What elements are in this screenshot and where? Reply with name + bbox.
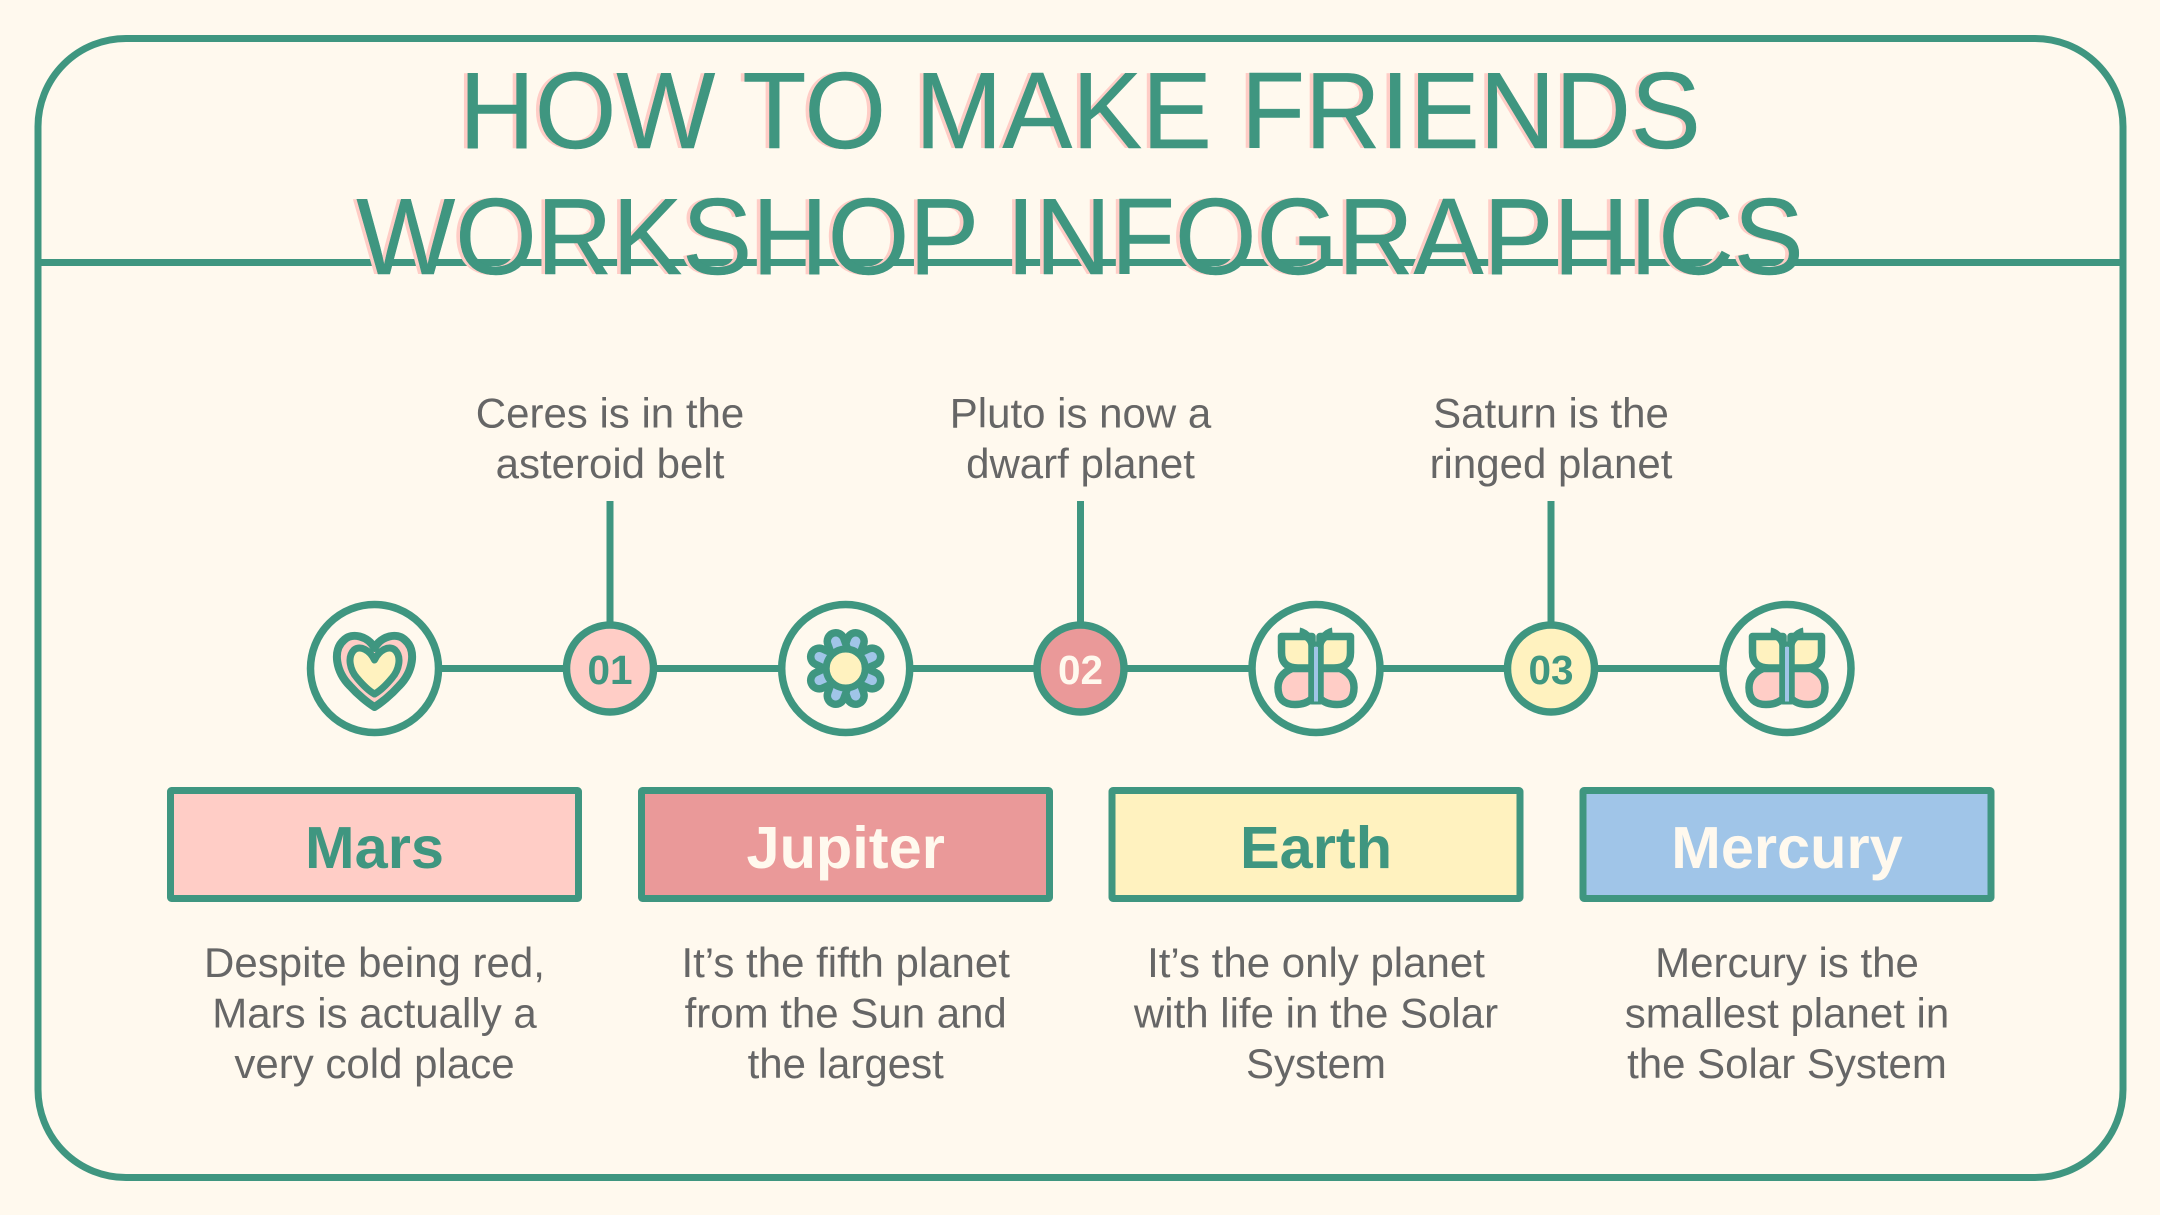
panel: Mars: Mars	[305, 814, 444, 881]
panel: Mars: very cold place	[234, 1040, 515, 1087]
icon: butterfly	[1723, 604, 1851, 732]
icon: flower	[782, 604, 910, 732]
panel: Jupiter: from the Sun and	[685, 990, 1007, 1036]
panel: Earth: It’s the only planet	[1147, 939, 1485, 986]
panel: Jupiter	[642, 790, 1050, 1087]
note: Saturn	[1430, 390, 1673, 487]
panel: Mercury: Mercury is the	[1655, 939, 1919, 986]
panel: Earth: System	[1246, 1040, 1386, 1087]
step badge 01	[566, 625, 654, 712]
note: Ceres	[476, 390, 744, 487]
panel: Earth	[1112, 790, 1520, 1087]
icon: butterfly	[1252, 604, 1380, 732]
step badge 02: 02	[1058, 647, 1103, 693]
panel: Mercury: smallest planet in	[1625, 990, 1949, 1036]
title: WORKSHOP INFOGRAPHICS	[356, 176, 1804, 298]
panel: Mars: Despite being red,	[204, 939, 545, 986]
timeline line	[374, 665, 1787, 672]
note: Pluto	[950, 390, 1212, 487]
note: Ceres: Ceres is in the	[476, 390, 744, 436]
panel: Mercury	[1583, 790, 1991, 1087]
step badge 02	[1037, 625, 1124, 712]
title: HOW TO MAKE FRIENDS	[459, 50, 1701, 172]
header divider	[38, 259, 2122, 266]
panel: Mercury: Mercury	[1671, 814, 1903, 881]
panel: Earth: with life in the Solar	[1133, 990, 1498, 1036]
note: Pluto: Pluto is now a	[950, 390, 1212, 436]
note: Pluto: dwarf planet	[966, 440, 1195, 487]
panel: Jupiter: It’s the fifth planet	[681, 939, 1010, 986]
panel: Mercury: the Solar System	[1627, 1040, 1947, 1087]
connector 02	[1077, 501, 1084, 625]
note: Saturn: Saturn is the	[1433, 390, 1669, 436]
panel: Jupiter: Jupiter	[747, 814, 945, 881]
step badge 03: 03	[1528, 647, 1574, 693]
note: Ceres: asteroid belt	[496, 440, 725, 487]
step badge 01: 01	[587, 647, 633, 693]
title	[353, 50, 1804, 298]
panel: Jupiter: the largest	[748, 1040, 944, 1087]
step badge 03	[1508, 625, 1594, 712]
panel: Mars: Mars is actually a	[212, 990, 537, 1036]
panel: Earth: Earth	[1240, 814, 1392, 881]
connector 03	[1548, 501, 1554, 625]
connector 01	[606, 501, 614, 625]
panel: Mars	[170, 790, 578, 1087]
note: Saturn: ringed planet	[1430, 440, 1673, 487]
icon: heart	[310, 604, 438, 732]
